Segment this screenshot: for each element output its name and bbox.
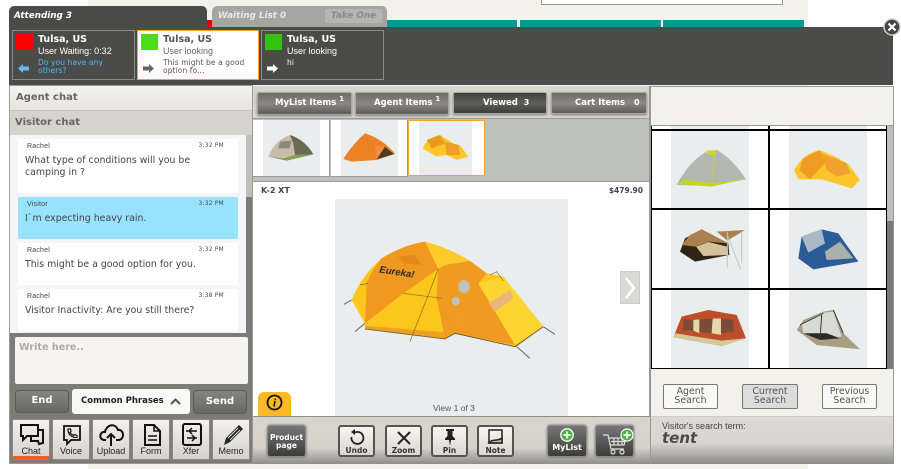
product tab bar	[253, 86, 649, 119]
chat log background	[10, 135, 246, 333]
card: visitor looking selected	[137, 30, 259, 80]
button: zoom	[385, 425, 422, 457]
results grid	[651, 126, 887, 369]
close button	[883, 18, 901, 36]
result tent brown	[680, 229, 745, 269]
card: visitor waiting: Do you have any	[38, 58, 103, 67]
send button	[193, 390, 247, 414]
button: agent search: Agent	[677, 386, 704, 397]
message: agent question: 3:32 PM	[199, 143, 224, 149]
result cell 1	[652, 131, 768, 208]
tab: waiting list	[212, 6, 387, 27]
top strip right	[770, 126, 886, 129]
message input	[15, 337, 248, 384]
card: visitor looking: Tulsa, US	[287, 34, 336, 45]
result tent tan	[797, 310, 860, 349]
result cell 2	[770, 131, 886, 208]
tool: memo: Memo	[218, 446, 244, 456]
tool: form: Form	[140, 446, 162, 456]
tab: mylist items: MyList Items 1	[275, 95, 344, 108]
main product tent	[344, 242, 555, 358]
tool: upload	[92, 419, 130, 460]
agent chat heading: Agent chat	[16, 92, 78, 103]
product price: $479.90	[609, 186, 643, 195]
agent chat heading	[10, 86, 252, 111]
message: visitor reply: 3:32 PM	[199, 201, 224, 207]
card: visitor looking: User looking	[287, 46, 337, 56]
tab: viewed active	[453, 92, 547, 114]
common phrases	[72, 389, 190, 414]
tool: memo	[212, 419, 250, 460]
button: previous search: Previous	[830, 386, 869, 397]
button: pin: Pin	[443, 446, 456, 455]
button: add to mylist: MyList	[552, 443, 582, 452]
message input: Write here..	[19, 342, 84, 353]
message: agent suggestion: 3:32 PM	[199, 247, 224, 253]
tool: chat	[12, 419, 50, 460]
card: visitor waiting: others?	[38, 66, 67, 75]
end button	[15, 390, 69, 413]
result cell 6	[770, 290, 886, 368]
message: inactivity	[18, 289, 238, 331]
message: visitor reply: I`m expecting heavy rain.	[25, 213, 146, 224]
button: agent search: Search	[674, 395, 707, 406]
tab: attending	[9, 6, 207, 27]
button: note	[477, 425, 514, 457]
next image arrow	[620, 271, 640, 304]
card: visitor waiting: Tulsa, US	[38, 34, 87, 45]
message: agent suggestion: This might be a good option for you.	[25, 259, 196, 270]
message: inactivity: Rachel	[27, 293, 50, 300]
card: visitor looking selected: Tulsa, US	[163, 34, 212, 45]
button: previous search: Search	[833, 395, 866, 406]
info tab: i	[273, 396, 277, 410]
result tent grey	[677, 150, 746, 187]
button: current search: Current	[752, 386, 788, 397]
button: note: Note	[485, 446, 506, 455]
top strip left	[652, 126, 768, 129]
card: visitor looking selected: User looking	[163, 46, 213, 56]
tool: chat: Chat	[21, 446, 40, 456]
message: agent question: What type of conditions will you be	[25, 155, 190, 166]
tool: xfer	[172, 419, 210, 460]
thumbnail 1	[253, 120, 330, 177]
card: visitor waiting	[12, 30, 135, 80]
tool: voice: Voice	[60, 446, 82, 456]
message: agent question: camping in ?	[25, 167, 85, 178]
thumbnail 3 selected	[408, 120, 485, 176]
result tent yellow	[794, 150, 860, 188]
thumbnail tent yellow	[423, 135, 468, 160]
end button: End	[31, 395, 53, 406]
thumbnail tent orange	[343, 133, 395, 162]
message: inactivity: 3:38 PM	[199, 293, 224, 299]
button: previous search	[822, 384, 877, 409]
message: inactivity: Visitor Inactivity: Are you still there?	[25, 305, 194, 316]
header dark bar	[9, 27, 893, 85]
info tab	[258, 392, 291, 416]
message: agent question: Rachel	[27, 143, 50, 150]
background page panel	[88, 0, 808, 469]
button: current search: Search	[754, 395, 786, 406]
visitor chat heading: Visitor chat	[15, 117, 80, 128]
panel: chat	[9, 85, 253, 464]
tab: mylist items	[257, 92, 352, 115]
thumbnail 2	[331, 120, 408, 177]
view counter: View 1 of 3	[433, 403, 475, 413]
toolbar	[253, 416, 650, 464]
button: agent search	[663, 384, 718, 409]
visitor chat heading	[10, 111, 252, 135]
background search box	[541, 0, 783, 5]
button: current search	[742, 384, 798, 409]
result tent red	[673, 310, 746, 346]
result tent blue	[798, 229, 858, 269]
button: product page: Product	[270, 433, 303, 442]
search term panel	[651, 416, 893, 464]
card: visitor looking	[261, 30, 384, 80]
panel: search results	[650, 86, 894, 464]
message: agent suggestion	[18, 243, 238, 285]
common phrases: Common Phrases	[81, 396, 164, 406]
tool: voice	[52, 419, 90, 460]
message: visitor reply	[18, 197, 238, 239]
product photo background	[335, 199, 568, 416]
button: undo: Undo	[346, 446, 367, 455]
tab: attending: Attending 3	[14, 11, 72, 21]
tool: form	[132, 419, 170, 460]
button: pin	[431, 425, 468, 457]
background teal navigation	[387, 20, 804, 28]
tool: xfer: Xfer	[183, 446, 199, 456]
tab: agent items	[355, 92, 449, 115]
button: zoom: Zoom	[392, 446, 415, 455]
button: add to mylist	[547, 425, 587, 457]
card: visitor looking selected: option fo...	[163, 66, 205, 75]
tab: waiting list: Waiting List 0	[218, 11, 286, 21]
red tab gap	[207, 20, 212, 27]
results header	[651, 87, 893, 126]
tab: cart items	[551, 92, 647, 114]
panel: product center	[253, 86, 650, 464]
card: visitor looking: hi	[287, 58, 294, 67]
button: add to cart	[595, 425, 634, 457]
result cell 5	[652, 290, 768, 368]
results scrollbar	[887, 126, 893, 369]
card: visitor waiting: User Waiting: 0:32	[38, 46, 112, 56]
thumbnail tent beige	[268, 135, 313, 161]
search term value: tent	[662, 429, 697, 447]
tab: cart items: Cart Items 0	[575, 98, 640, 108]
chat scrollbar	[246, 135, 252, 333]
tab: agent items: Agent Items 1	[374, 95, 440, 108]
message: agent question	[18, 139, 238, 193]
message: agent suggestion: Rachel	[27, 247, 50, 254]
product name: K-2 XT	[261, 186, 290, 195]
result cell 4	[770, 210, 886, 288]
card: visitor looking selected: This might be a good	[163, 58, 244, 67]
tab: waiting list: Take One	[331, 11, 376, 21]
tab: viewed active: Viewed 3	[483, 98, 529, 108]
button: product page	[267, 425, 306, 457]
button: undo	[338, 425, 375, 457]
search term label: Visitor's search term:	[662, 421, 746, 431]
result cell 3	[652, 210, 768, 288]
tool: upload: Upload	[97, 446, 125, 456]
message: visitor reply: Visitor	[27, 201, 48, 208]
send button: Send	[206, 396, 234, 407]
thumbnail strip	[253, 119, 649, 182]
main product tent: Eureka!	[379, 264, 416, 281]
button: product page: page	[276, 441, 297, 450]
